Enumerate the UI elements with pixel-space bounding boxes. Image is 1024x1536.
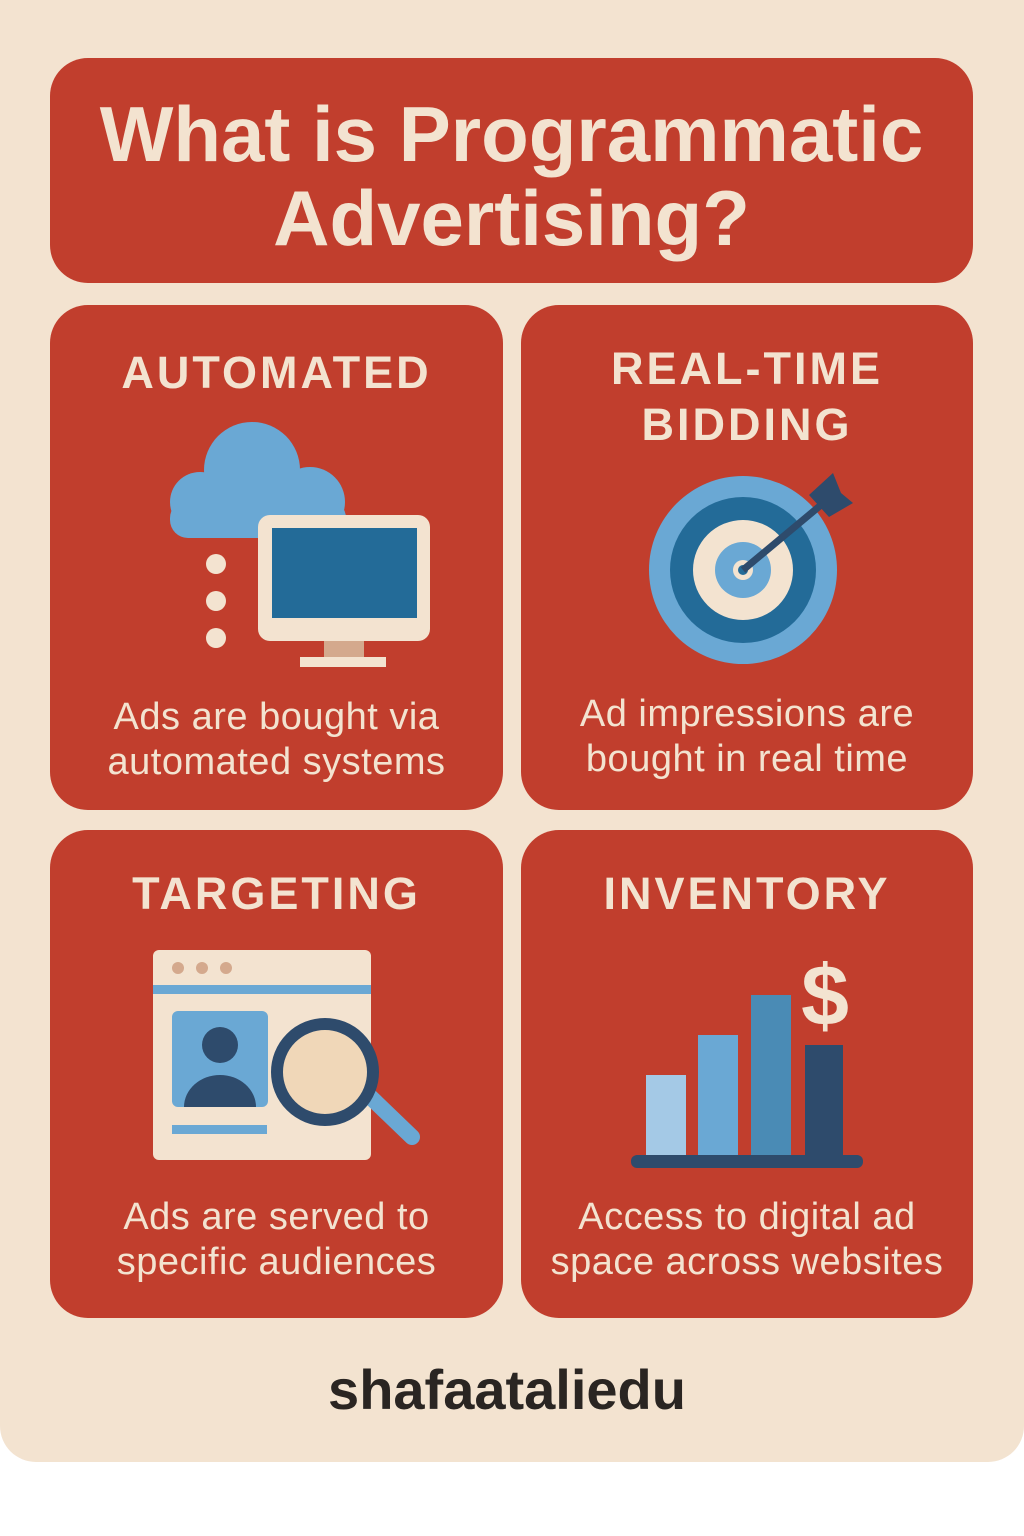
icon: bar chart with dollar: $	[801, 948, 849, 1044]
panel: inventory	[521, 830, 973, 1318]
icon: target	[649, 473, 853, 664]
heading	[611, 343, 883, 450]
icon: cloud and computer	[170, 422, 430, 667]
description: Ads are served to	[123, 1196, 430, 1238]
panel: automated	[50, 305, 503, 810]
title: Advertising?	[273, 174, 750, 262]
icon: bar chart with dollar	[631, 948, 863, 1168]
footer brand: shafaataliedu	[328, 1358, 686, 1421]
description: Ad impressions are	[580, 693, 914, 735]
icon: browser with magnifier	[153, 950, 420, 1160]
title: What is Programmatic	[100, 90, 923, 178]
description	[108, 696, 445, 783]
description	[580, 693, 914, 780]
description: bought in real time	[586, 738, 908, 780]
title	[50, 58, 973, 283]
description: Ads are bought via	[114, 696, 439, 738]
heading: BIDDING	[642, 399, 852, 450]
heading: REAL-TIME	[611, 343, 883, 394]
description	[551, 1196, 943, 1283]
description: specific audiences	[117, 1241, 436, 1283]
description	[117, 1196, 436, 1283]
heading: automated: AUTOMATED	[121, 347, 432, 398]
heading: INVENTORY	[603, 868, 891, 919]
panel: targeting	[50, 830, 503, 1318]
panel: real-time bidding	[521, 305, 973, 810]
description: Access to digital ad	[578, 1196, 916, 1238]
description: automated systems	[108, 741, 445, 783]
description: space across websites	[551, 1241, 943, 1283]
heading: TARGETING	[132, 868, 421, 919]
